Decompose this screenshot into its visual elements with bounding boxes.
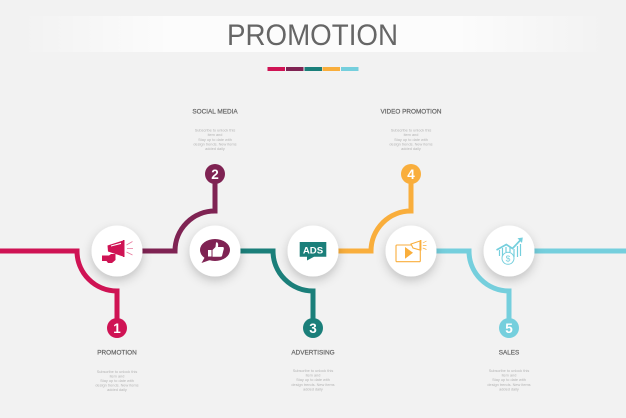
- icon circle 5: sales growth: [484, 226, 534, 276]
- step 5: sales: [436, 251, 626, 391]
- connector 3: [240, 251, 313, 328]
- body text 1: item and: [110, 374, 124, 378]
- number badge 1: [107, 318, 127, 338]
- body text 4: added daily: [401, 147, 421, 151]
- icon circle 4: video promotion: [386, 226, 436, 276]
- title band: [20, 16, 606, 52]
- icon circle 3: ADS sign: ADS: [303, 245, 324, 256]
- connector 1: [0, 251, 117, 328]
- number badge 5: [499, 318, 519, 338]
- icon circle 2: thumbs-up speech bubble: [190, 226, 240, 276]
- connector 2: [142, 174, 215, 251]
- icon circle 3: ADS sign: [288, 226, 338, 276]
- body text 5: added daily: [499, 387, 519, 391]
- body text 3: added daily: [303, 387, 323, 391]
- number badge 2: 2: [211, 167, 219, 182]
- body text 2: added daily: [205, 147, 225, 151]
- body text 4: item and: [404, 133, 418, 137]
- title: PROMOTION: [227, 19, 398, 52]
- heading 4: VIDEO PROMOTION: [380, 108, 442, 116]
- number badge 5: 5: [505, 321, 513, 336]
- number badge 4: [401, 164, 421, 184]
- number badge 2: [205, 164, 225, 184]
- step 4: video promotion: [338, 108, 442, 251]
- heading 1: PROMOTION: [97, 350, 137, 356]
- heading 2: SOCIAL MEDIA: [192, 108, 238, 116]
- body text 3: item and: [306, 374, 320, 378]
- body text 2: Subscribe to unlock this: [195, 129, 235, 133]
- icon circle 5: sales growth: $: [506, 253, 511, 263]
- connector 4: [338, 174, 411, 251]
- body text 3: design trends. New items: [291, 383, 335, 387]
- heading 3: ADVERTISING: [291, 350, 335, 356]
- body text 5: Stay up to date with: [492, 378, 526, 382]
- body text 2: Stay up to date with: [198, 138, 232, 142]
- body text 5: item and: [502, 374, 516, 378]
- number badge 3: 3: [309, 321, 317, 336]
- number badge 3: [303, 318, 323, 338]
- step 3: advertising: [240, 251, 335, 391]
- body text 5: design trends. New items: [487, 383, 531, 387]
- step 1: promotion: [0, 251, 139, 392]
- number badge 4: 4: [407, 167, 415, 182]
- body text 1: Subscribe to unlock this: [97, 370, 137, 374]
- number badge 1: 1: [113, 321, 121, 336]
- icon circle 1: megaphone: [92, 226, 142, 276]
- body text 2: design trends. New items: [193, 142, 237, 146]
- body text 1: added daily: [107, 388, 127, 392]
- step 2: social media: [142, 108, 238, 251]
- body text 4: Stay up to date with: [394, 138, 428, 142]
- body text 3: Subscribe to unlock this: [293, 369, 333, 373]
- body text 4: Subscribe to unlock this: [391, 129, 431, 133]
- body text 1: Stay up to date with: [100, 379, 134, 383]
- colour legend bar: [268, 67, 358, 71]
- heading 5: SALES: [499, 350, 519, 356]
- connector 5: [436, 251, 626, 328]
- body text 4: design trends. New items: [389, 142, 433, 146]
- body text 5: Subscribe to unlock this: [489, 369, 529, 373]
- body text 3: Stay up to date with: [296, 378, 330, 382]
- body text 1: design trends. New items: [95, 384, 139, 388]
- body text 2: item and: [208, 133, 222, 137]
